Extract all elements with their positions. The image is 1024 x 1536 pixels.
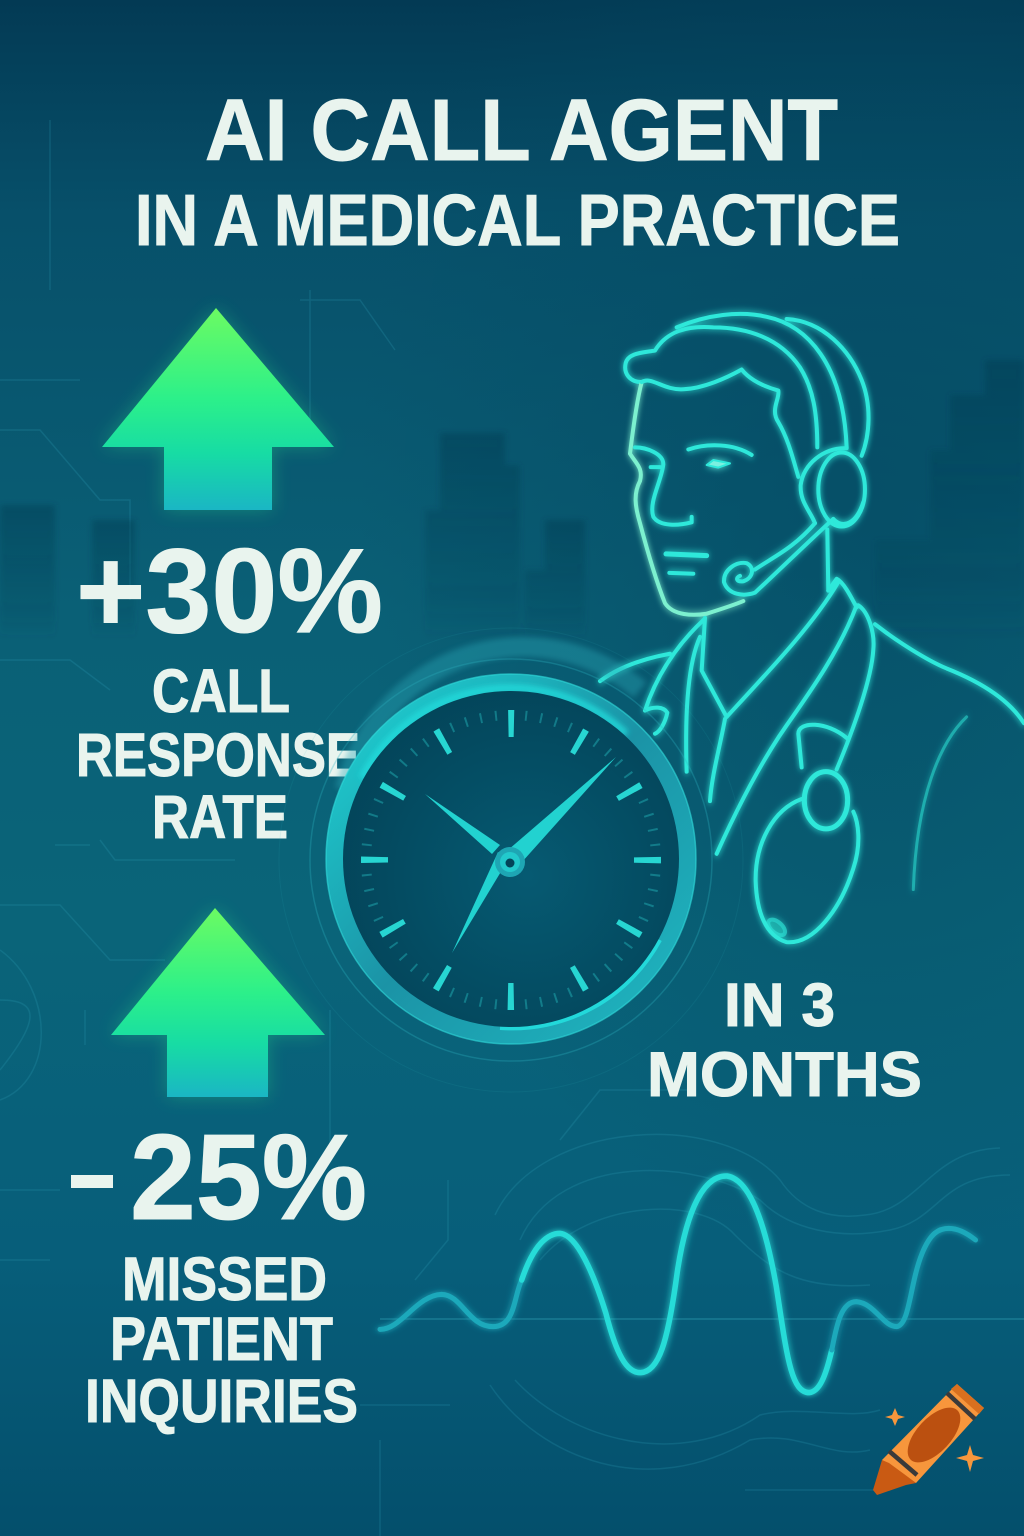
caption: in 3 months: IN 3 — [724, 971, 835, 1039]
label: call response rate: CALL — [152, 657, 290, 725]
crayon cap — [951, 1384, 984, 1414]
hair and head outline — [625, 327, 817, 447]
clock halo rings — [310, 659, 712, 1061]
shoulder and sleeve — [875, 624, 1024, 723]
sparkle large — [956, 1445, 984, 1472]
facial features — [635, 447, 692, 525]
label: missed patient inquiries: INQUIRIES — [85, 1367, 358, 1435]
caption: in 3 months — [647, 971, 922, 1110]
sparkle small — [885, 1408, 905, 1426]
label: missed patient inquiries: PATIENT — [110, 1305, 333, 1373]
arrow up: call response rate — [102, 308, 334, 510]
icon: orange crayon with sparkles — [873, 1384, 984, 1495]
crayon body — [882, 1384, 984, 1483]
waveform — [380, 1176, 1024, 1393]
caption: in 3 months: MONTHS — [647, 1040, 922, 1110]
neck and collar — [825, 529, 830, 591]
city skyline — [0, 360, 1024, 640]
label: missed patient inquiries — [85, 1245, 358, 1435]
label: call response rate: RATE — [152, 783, 288, 851]
title line 2: IN A MEDICAL PRACTICE — [135, 181, 900, 261]
crayon bands — [947, 1393, 975, 1419]
headset — [801, 448, 847, 523]
minor ticks — [366, 715, 656, 1005]
clock bezel — [335, 683, 687, 1035]
major ticks — [374, 724, 648, 996]
clock — [279, 628, 743, 1092]
stat: +30%: +30% — [76, 524, 383, 658]
crayon oval — [898, 1399, 970, 1471]
crayon tip — [873, 1460, 916, 1495]
label: call response rate — [76, 657, 360, 851]
arrow up: missed inquiries — [111, 908, 325, 1097]
stethoscope — [804, 772, 848, 829]
clock hands — [425, 757, 616, 953]
label: call response rate: RESPONSE — [76, 721, 360, 789]
title line 1: AI CALL AGENT — [205, 82, 838, 179]
title — [135, 82, 900, 261]
label: missed patient inquiries: MISSED — [122, 1245, 327, 1313]
stat: -25%: 25% — [130, 1109, 367, 1245]
icon: doctor with headset line art — [600, 314, 1024, 942]
